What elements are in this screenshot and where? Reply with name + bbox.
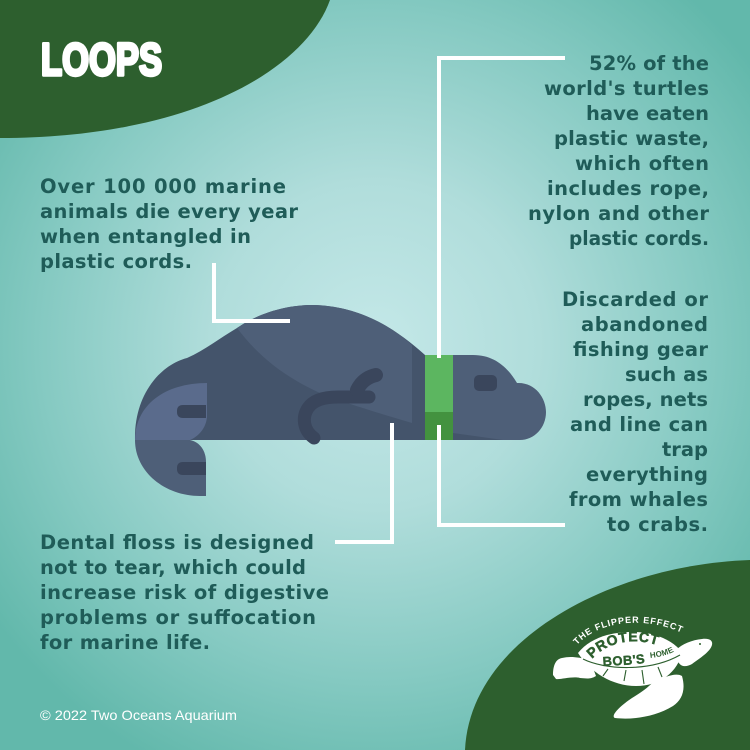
text block: marine animals: animals die every year xyxy=(40,200,298,223)
copyright: © 2022 Two Oceans Aquarium xyxy=(40,707,237,723)
head xyxy=(676,639,712,666)
lower tail flipper xyxy=(135,440,206,496)
text block: fishing gear: to crabs. xyxy=(607,513,708,536)
top-left green corner shape xyxy=(0,0,330,138)
seal front flipper xyxy=(304,375,376,438)
text block: fishing gear xyxy=(562,288,708,536)
front flipper xyxy=(614,675,684,719)
callout line: marine animals xyxy=(214,263,290,321)
callout line: turtles xyxy=(439,58,565,358)
text block: fishing gear: Discarded or xyxy=(562,288,708,311)
callout line: dental floss xyxy=(335,423,392,542)
head shadow xyxy=(453,433,503,440)
text block: dental floss: not to tear, which could xyxy=(40,556,306,579)
text block: marine animals: plastic cords. xyxy=(40,250,192,273)
seal body xyxy=(135,305,425,440)
text block: dental floss: for marine life. xyxy=(40,631,210,654)
seal illustration xyxy=(135,305,546,496)
turtle eye xyxy=(699,643,701,645)
logo home text: HOME xyxy=(650,646,674,658)
title: LOOPS xyxy=(41,34,162,85)
logo text: THE FLIPPER EFFECT xyxy=(572,616,684,644)
rear flipper xyxy=(553,657,596,679)
text block: turtles: world's turtles xyxy=(544,77,709,100)
text block: fishing gear: ropes, nets xyxy=(583,388,708,411)
logo bob text: BOB'S xyxy=(603,654,644,666)
text block: dental floss: problems or suffocation xyxy=(40,606,316,629)
text block: fishing gear: fishing gear xyxy=(573,338,708,361)
shell scutes xyxy=(583,655,680,684)
text block: fishing gear: and line can xyxy=(570,413,708,436)
text block: marine animals: Over 100 000 marine xyxy=(40,175,286,198)
text block: turtles xyxy=(528,52,709,250)
upper tail flipper xyxy=(135,383,207,440)
seal eye xyxy=(474,375,497,391)
text block: turtles: plastic waste, xyxy=(554,127,709,150)
text block: dental floss: increase risk of digestive xyxy=(40,581,329,604)
flipper marks xyxy=(177,405,206,475)
text block: turtles: includes rope, xyxy=(547,177,709,200)
text block: fishing gear: abandoned xyxy=(581,313,708,336)
seal head xyxy=(453,355,546,440)
text block: marine animals: when entangled in xyxy=(40,225,251,248)
text block: fishing gear: such as xyxy=(625,363,708,386)
logo protect text: PROTECT xyxy=(586,632,660,659)
shell xyxy=(578,632,682,686)
green loop band shadow xyxy=(425,412,453,440)
bottom-right green corner shape xyxy=(465,560,750,750)
text block: turtles: which often xyxy=(575,152,709,175)
green loop band xyxy=(425,355,453,412)
text block: turtles: have eaten xyxy=(586,102,709,125)
seal back highlight xyxy=(237,305,412,423)
text block: fishing gear: trap xyxy=(662,438,708,461)
text block: marine animals xyxy=(40,175,298,273)
text block: dental floss: Dental floss is designed xyxy=(40,531,314,554)
text block: fishing gear: everything xyxy=(586,463,708,486)
text block: dental floss xyxy=(40,531,329,654)
text block: turtles: 52% of the xyxy=(589,52,709,75)
text block: turtles: nylon and other xyxy=(528,202,709,225)
text block: turtles: plastic cords. xyxy=(569,227,709,250)
callout line: fishing gear xyxy=(439,425,565,525)
text block: fishing gear: from whales xyxy=(569,488,708,511)
logo: turtle xyxy=(553,616,712,719)
